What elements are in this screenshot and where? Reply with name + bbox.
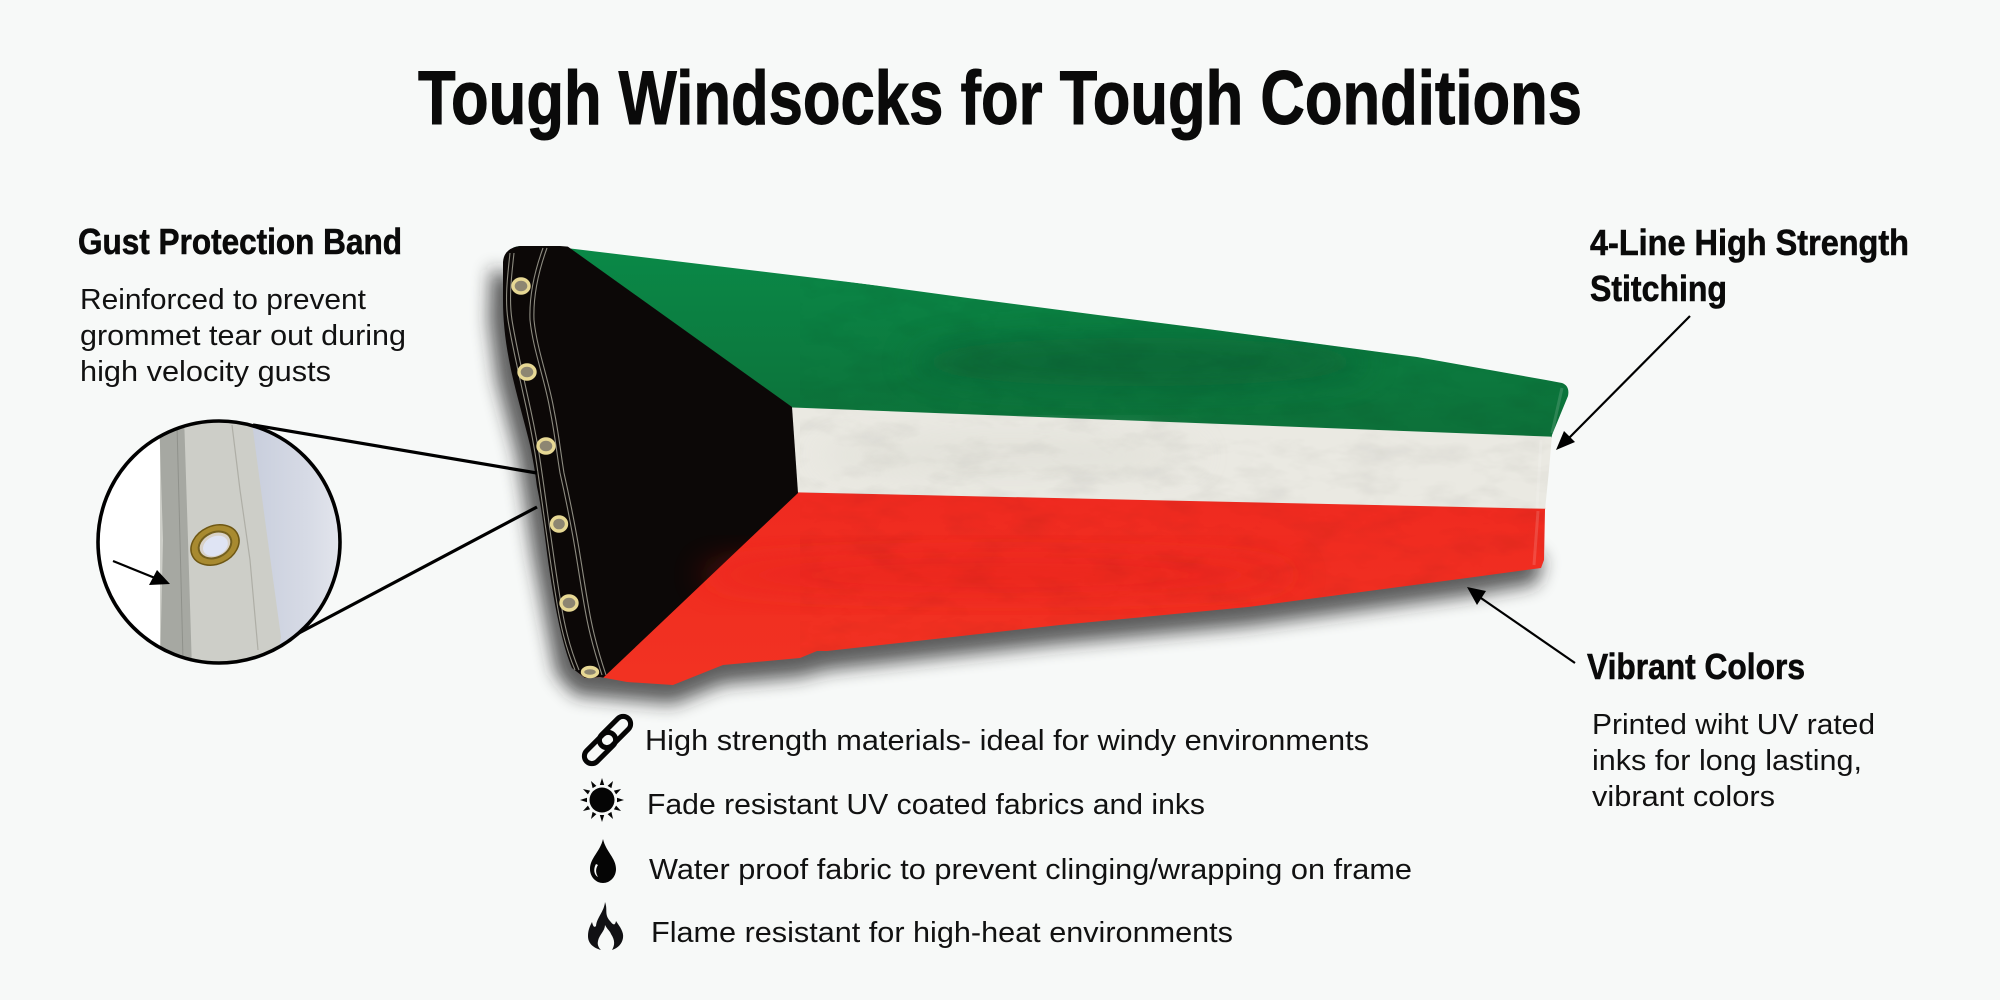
text: gust protection description — [80, 284, 406, 388]
zoom callout lines — [253, 425, 537, 633]
text: vibrant colors description: vibrant colors — [1592, 781, 1775, 813]
text: water proof: Water proof fabric to prevent clinging/wrapping on frame — [649, 854, 1412, 886]
text: gust protection description: high velocity gusts — [80, 356, 331, 388]
text: flame resistant: Flame resistant for high-heat environments — [651, 917, 1233, 949]
arrow: vibrant colors — [1467, 587, 1575, 663]
windsock — [495, 240, 1580, 700]
text: gust protection description: grommet tear out during — [80, 320, 406, 352]
heading: 4-line stitching: Stitching — [1590, 268, 1727, 309]
grommets — [513, 279, 598, 676]
text: vibrant colors description: Printed wiht UV rated — [1592, 709, 1875, 741]
text: fade resistant: Fade resistant UV coated fabrics and inks — [647, 789, 1205, 821]
text: vibrant colors description — [1592, 709, 1875, 813]
icon: flame — [588, 902, 623, 950]
icon: sun — [580, 778, 624, 822]
brass grommet — [190, 524, 240, 566]
windsock shadow — [489, 268, 1544, 704]
cream fabric — [160, 415, 281, 670]
blue-white lining — [252, 428, 338, 644]
heading: 4-line stitching — [1590, 222, 1909, 309]
gust protection band stitching — [507, 248, 606, 675]
fabric shading — [700, 260, 1570, 670]
text: gust protection description: Reinforced to prevent — [80, 284, 366, 316]
lens ring — [98, 421, 340, 663]
red stripe — [578, 492, 1546, 685]
white stripe — [780, 407, 1560, 509]
title: Tough Windsocks for Tough Conditions — [418, 56, 1582, 141]
heading: vibrant colors: Vibrant Colors — [1587, 646, 1805, 687]
stitching — [232, 425, 258, 650]
heading: 4-line stitching: 4-Line High Strength — [1590, 222, 1909, 263]
arrow: stitching — [1556, 316, 1690, 450]
text: vibrant colors description: inks for long lasting, — [1592, 745, 1862, 777]
arrow inside lens — [113, 561, 170, 585]
icon: water drop — [590, 839, 616, 883]
heading: gust protection band: Gust Protection Band — [78, 221, 402, 262]
zoom lens: band close-up — [90, 415, 350, 670]
green stripe — [500, 240, 1580, 438]
hem stitching on tail end — [1534, 388, 1562, 565]
text: high strength: High strength materials- ideal for windy environments — [645, 725, 1369, 757]
reinforcement band — [160, 428, 192, 658]
black triangle hoist — [495, 240, 798, 690]
icon: chain link — [581, 713, 634, 767]
